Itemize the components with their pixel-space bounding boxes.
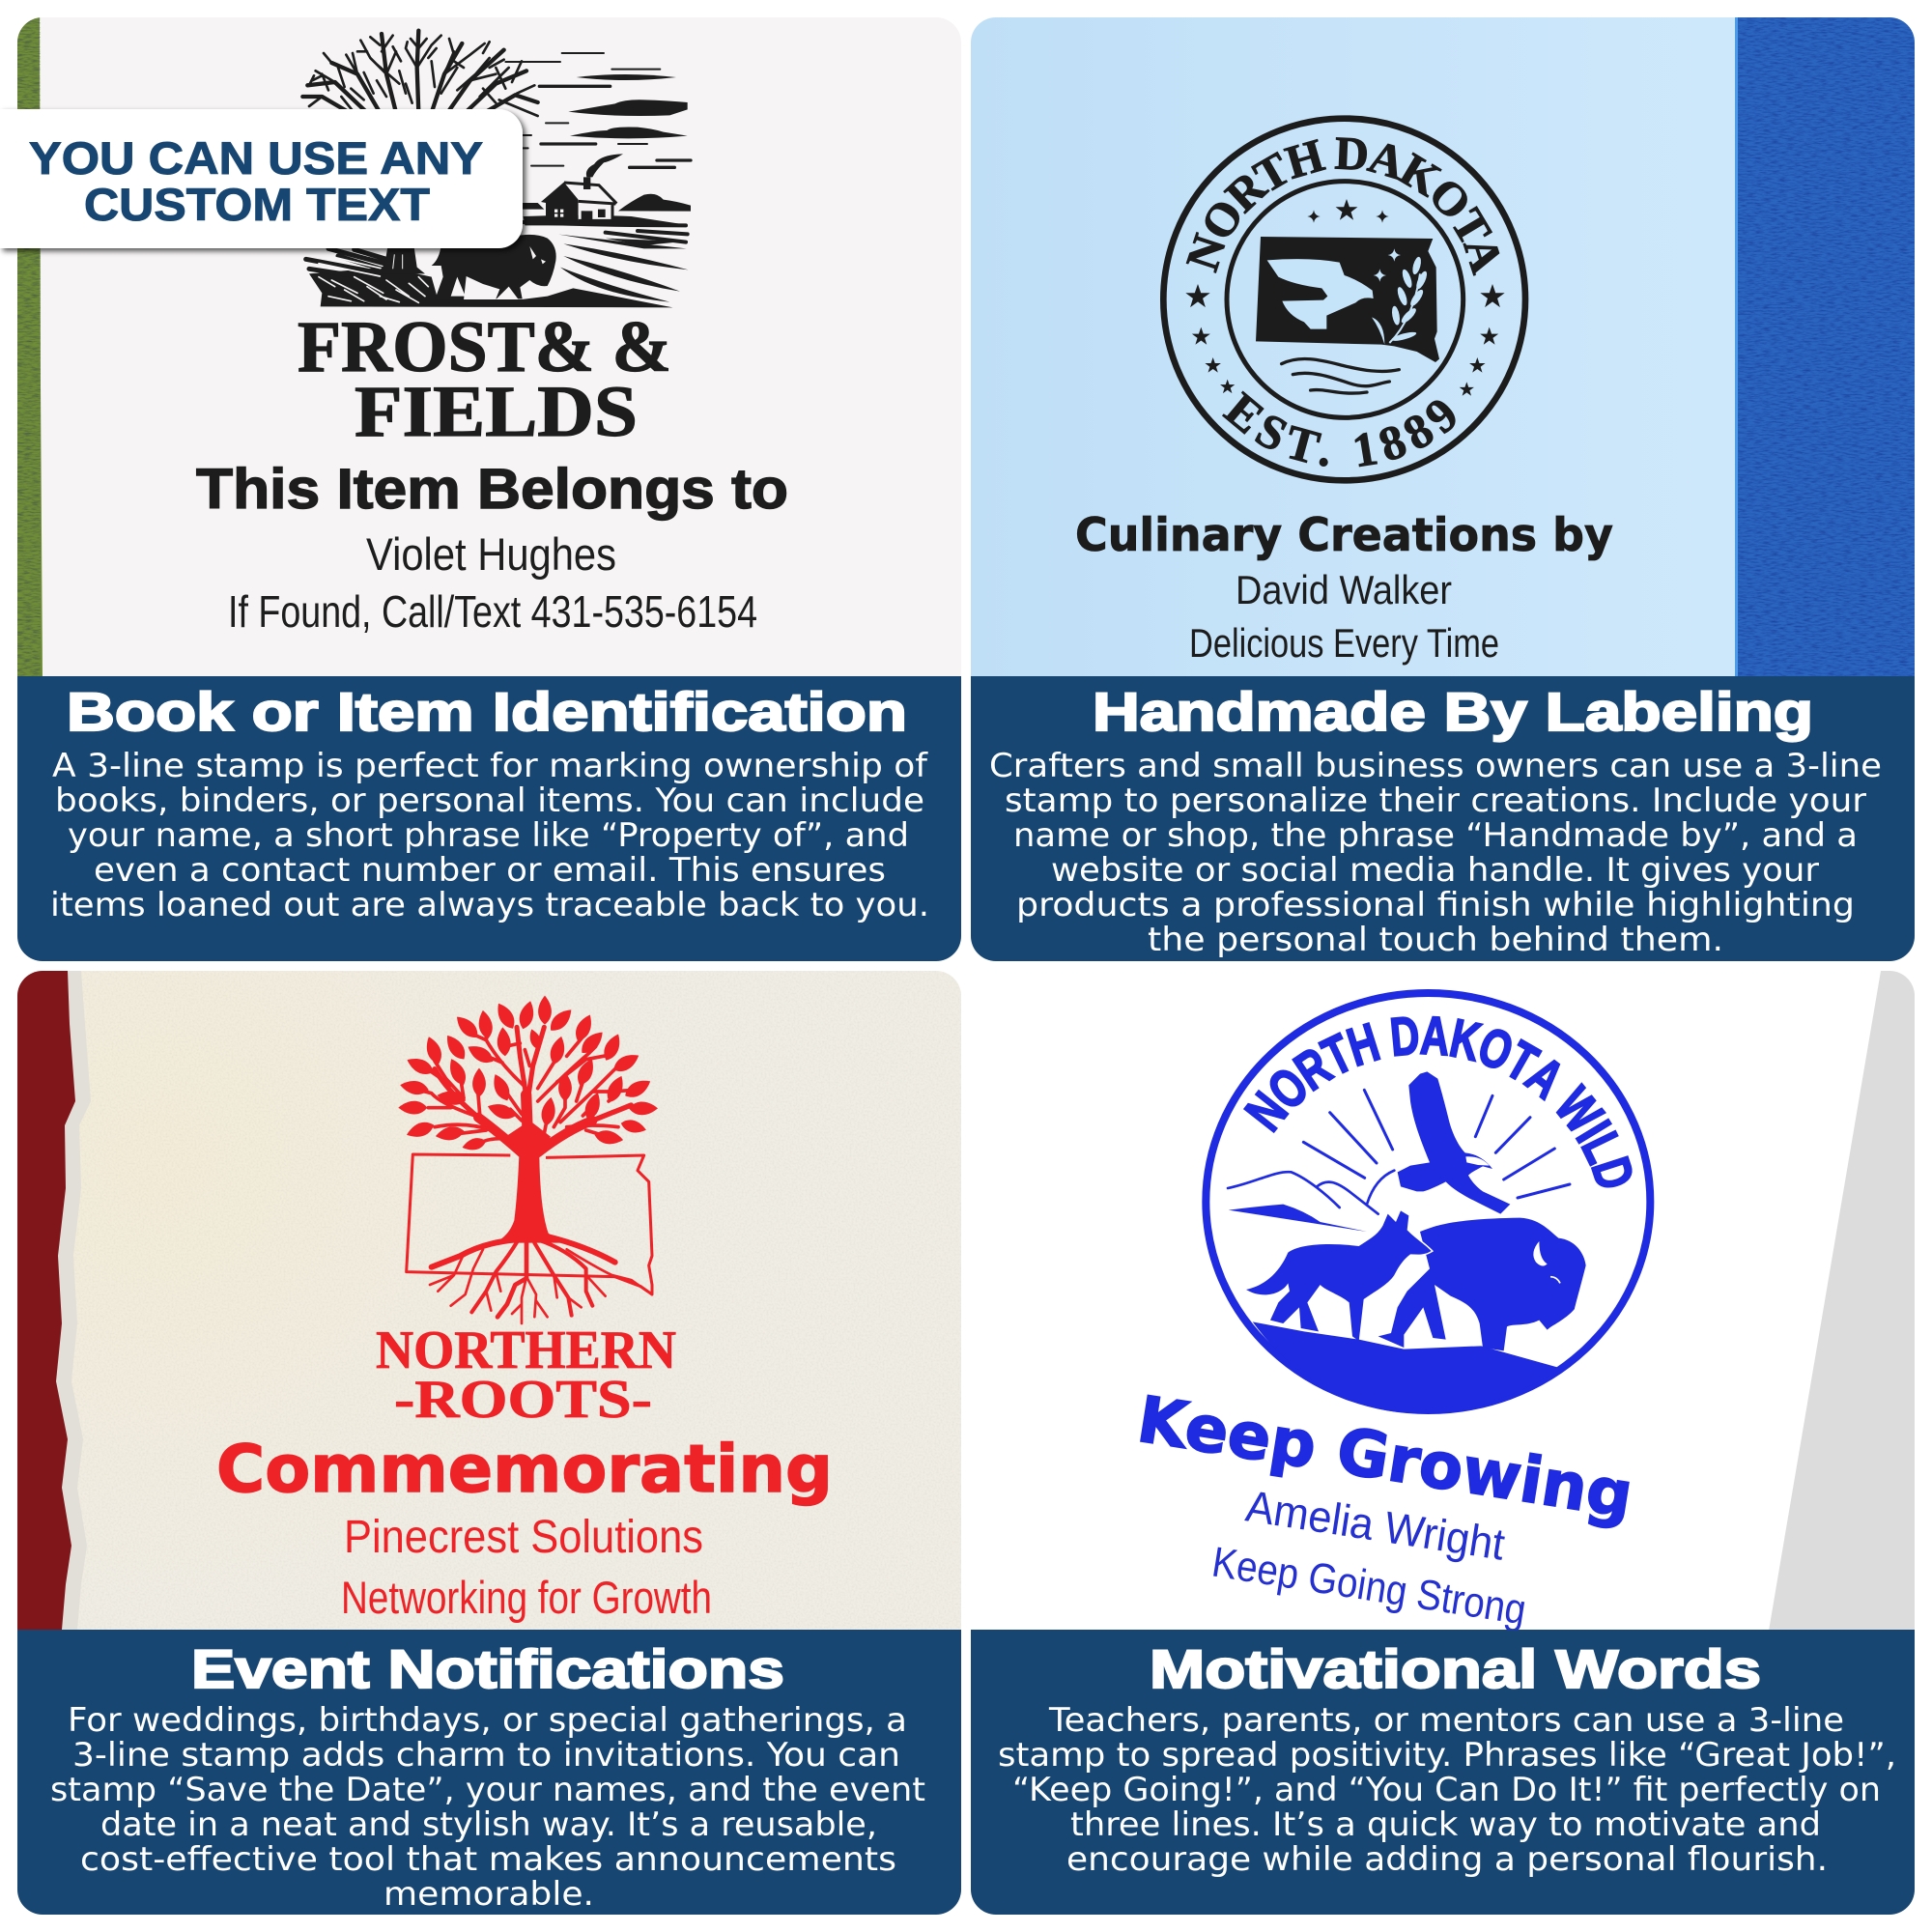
stamp line: name: Violet Hughes [366,528,616,580]
textured cream paper background [17,971,961,1915]
tree trunk [495,1121,568,1243]
caption body text: cost-effective tool that makes announcements [80,1840,896,1879]
red cover strip with torn edge [17,971,75,1630]
blue book cover strip [1735,17,1915,694]
white card background [971,971,1915,1915]
caption body text: Teachers, parents, or mentors can use a 3-line [1048,1701,1844,1740]
stamp line: name: Amelia Wright [1242,1480,1508,1570]
seal text: A [1516,1045,1575,1110]
green book cover strip [17,17,43,676]
caption heading: Event Notifications [191,1638,784,1699]
tree branches and roots [418,1027,647,1323]
stamp line: phone: If Found, Call/Text 431-535-6154 [228,586,757,637]
red tree and state stamp [398,996,658,1323]
caption body text: books, binders, or personal items. You can include [55,781,924,820]
stamp line: tagline: Networking for Growth [341,1572,712,1623]
stamp artwork: farm scene with tree and bison [302,31,691,307]
caption body text [50,1701,925,1914]
tree leaves [398,996,658,1153]
sun rays [1303,1090,1570,1198]
caption body text: stamp to spread positivity. Phrases like “Great Job!”, [998,1736,1896,1775]
farmhouse [541,154,623,220]
seal stars [1185,199,1505,396]
stamp line: keep growing: Keep Growing [1133,1382,1637,1533]
caption body text: three lines. It’s a quick way to motivate and [1070,1805,1821,1844]
river waves [1282,358,1399,393]
caption body text: website or social media handle. It gives your [1051,851,1819,890]
paper background [40,17,961,676]
caption body text: name or shop, the phrase “Handmade by”, and a [1013,816,1858,855]
panel: book or item identification [17,17,961,961]
caption body text: A 3-line stamp is perfect for marking ownership of [52,747,928,785]
stamp line: roots: -ROOTS- [394,1370,652,1430]
seal text: R [1285,1036,1342,1102]
caption band [17,1630,961,1915]
caption body text: date in a neat and stylish way. It’s a reusable, [100,1805,877,1844]
stamp line: culinary creations: Culinary Creations by [1075,509,1613,562]
round wildlife seal stamp [1206,993,1650,1413]
round seal stamp [1160,115,1528,484]
panel: handmade by labeling [971,17,1915,961]
stamp line: commemorating: Commemorating [216,1432,833,1508]
seal text: N [1234,1082,1299,1142]
seal text: W [1543,1076,1614,1144]
seal text: D [1387,1005,1422,1067]
seal text: L [1570,1123,1634,1172]
mountains [1228,1171,1394,1232]
caption body text [989,747,1882,959]
caption body text: products a professional finish while highlighting [1016,886,1855,924]
foreground grass [309,268,673,307]
stamp line: tagline: Keep Going Strong [1208,1538,1529,1634]
seal text: H [1341,1011,1386,1078]
caption body text: “Keep Going!”, and “You Can Do It!” fit perfectly on [1012,1771,1881,1809]
seal text: O [1470,1015,1521,1083]
stamp line: tagline: Delicious Every Time [1189,620,1499,666]
caption body text: stamp “Save the Date”, your names, and the event [50,1771,925,1809]
caption band [971,1630,1915,1915]
bison [432,235,556,300]
stamp line: name: David Walker [1236,567,1452,612]
seal text [1234,1005,1646,1197]
torn paper fringe [17,971,91,1630]
caption body text: encourage while adding a personal flourish. [1066,1840,1828,1879]
caption body text: For weddings, birthdays, or special gatherings, a [68,1701,907,1740]
field furrows [558,235,689,302]
caption body text [50,747,929,924]
wolf [1246,1210,1432,1341]
callout: you can use any custom text: CUSTOM TEXT [84,179,430,230]
seal text: T [1314,1023,1361,1088]
seal text: K [1445,1008,1487,1073]
caption body text: your name, a short phrase like “Property of”, and [68,816,909,855]
caption band [17,676,961,961]
caption band [971,676,1915,961]
seal text: I [1565,1111,1622,1151]
stamp line: brand name: FROST& & [298,307,671,387]
seal text: T [1496,1030,1548,1094]
caption heading: Handmade By Labeling [1093,681,1813,742]
caption body text: the personal touch behind them. [1148,921,1723,959]
callout: you can use any custom text: YOU CAN USE ANY [29,132,483,184]
seal text: D [1579,1151,1646,1197]
grey wedge behind card [1767,971,1915,1642]
caption heading: Book or Item Identification [67,681,907,742]
callout: you can use any custom text [0,109,523,248]
hill [1253,1321,1562,1413]
eagle [1398,1071,1510,1214]
light blue paper background [971,17,1915,961]
state silhouette with dove and wheat [1256,237,1439,362]
caption heading: Motivational Words [1150,1638,1761,1699]
tree trunk [381,248,425,274]
caption body text [998,1701,1896,1879]
stamp line: this item belongs to: This Item Belongs to [196,458,788,521]
caption body text: memorable. [384,1875,594,1914]
seal text: O [1257,1056,1321,1122]
stamp line: northern: NORTHERN [376,1321,676,1380]
stamp line: company: Pinecrest Solutions [344,1512,703,1563]
bison [1378,1218,1586,1350]
panel: motivational words [971,971,1915,1915]
caption body text: stamp to personalize their creations. Include your [1005,781,1866,820]
panel: event notifications [17,971,961,1915]
seal text: A [1419,1006,1451,1067]
state outline [407,1154,652,1294]
seal ring [1206,993,1650,1410]
seal text: north dakota: NORTH DAKOTA [1186,137,1499,276]
caption body text: even a contact number or email. This ensures [94,851,886,890]
seal text: established: EST. 1889 [1222,390,1456,468]
caption body text: 3-line stamp adds charm to invitations. You can [72,1736,900,1775]
caption body text: items loaned out are always traceable back to you. [50,886,929,924]
caption body text: Crafters and small business owners can use a 3-line [989,747,1882,785]
stamp line: brand name second row: FIELDS [355,372,638,452]
